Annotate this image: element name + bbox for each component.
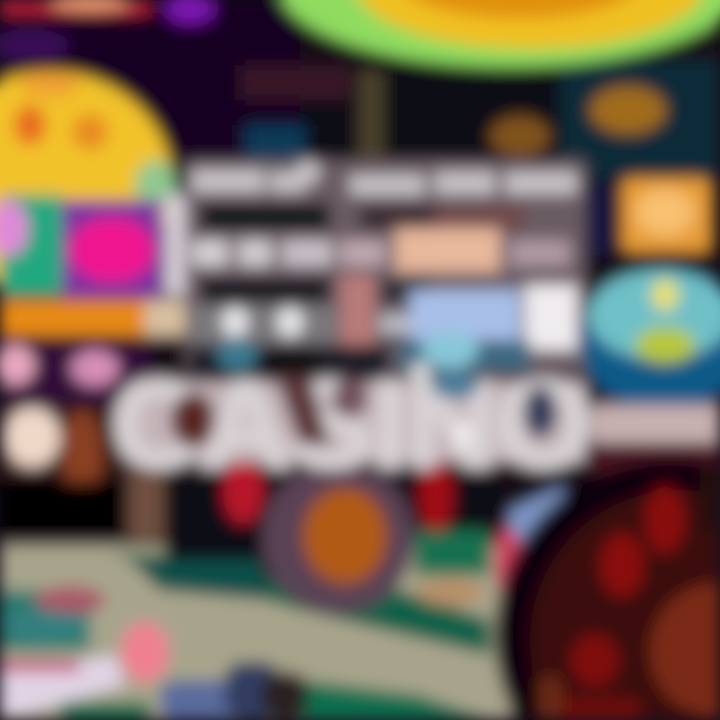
floor chips and cards [0,586,308,720]
wall signs [490,86,710,255]
banner with blurred lettering [185,160,585,376]
right blue dome machine [580,268,720,473]
large roulette wheel foreground [495,460,720,720]
ceiling lamp [278,0,720,67]
casino lettering: CASINO [112,356,592,492]
floor [0,530,510,720]
background wall [0,0,720,180]
roulette wheel centre [130,456,500,614]
left yellow dome machine [0,71,187,336]
left lower machines [0,342,164,540]
